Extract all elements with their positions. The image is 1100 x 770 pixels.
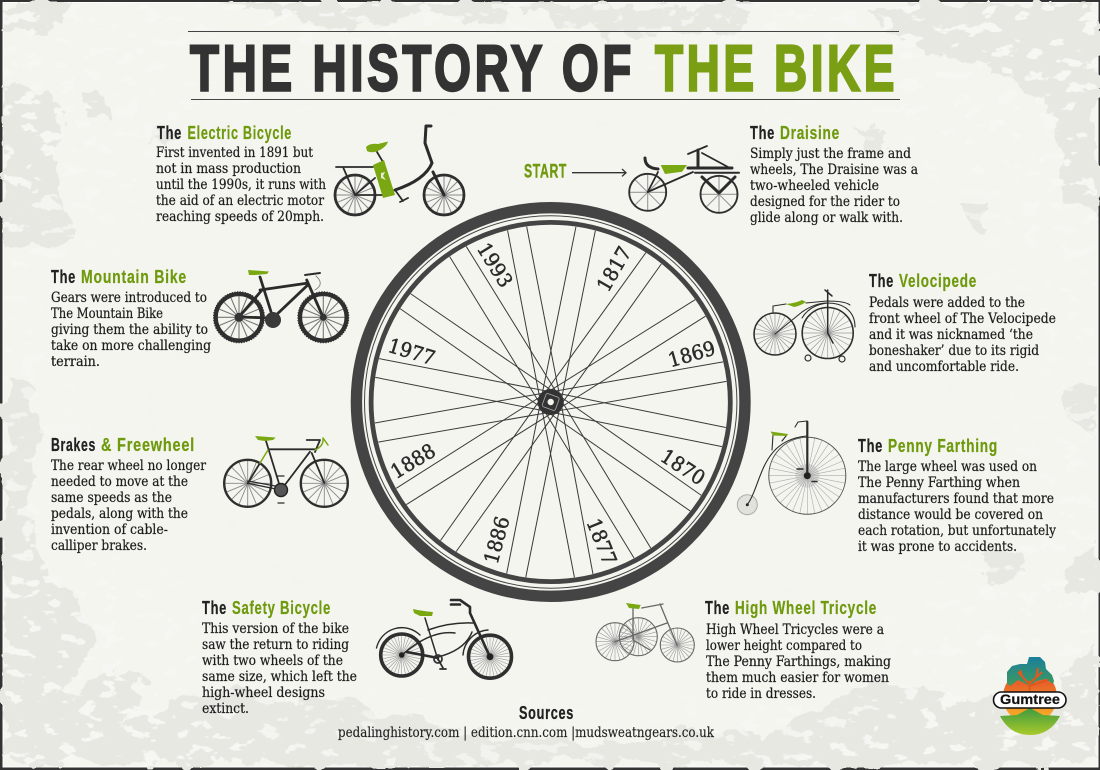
heading: & Freewheel: [101, 435, 195, 455]
heading: [51, 435, 195, 455]
text block: lower height compared to: [706, 638, 862, 654]
heading: The: [750, 123, 775, 143]
text block: distance would be covered on: [858, 507, 1043, 523]
wheel tyre and rim: [356, 208, 745, 596]
title: THE HISTORY OF: [190, 32, 635, 104]
heading: [858, 436, 998, 456]
text block: the aid of an electric motor: [156, 193, 324, 209]
heading: The: [869, 271, 894, 291]
heading: [750, 123, 840, 143]
heading: Velocipede: [899, 271, 977, 291]
text block: [51, 290, 211, 370]
heading: The: [51, 267, 76, 287]
logo orange sun: [1003, 670, 1057, 724]
text block: take on more challenging: [51, 338, 211, 354]
text block: two-wheeled vehicle: [750, 178, 879, 194]
year labels: 1877: [582, 515, 622, 568]
icon: electric bicycle: [335, 126, 464, 215]
text block: The large wheel was used on: [858, 459, 1037, 475]
text block: and it was nicknamed ‘the: [869, 327, 1033, 343]
heading: The: [202, 598, 227, 618]
text block: designed for the rider to: [750, 194, 900, 210]
text block: same size, which left the: [202, 669, 357, 685]
text block: reaching speeds of 20mph.: [156, 209, 324, 225]
sources: [338, 703, 715, 741]
heading: Electric Bicycle: [188, 123, 292, 143]
year labels: 1886: [479, 514, 515, 566]
text block: boneshaker’ due to its rigid: [869, 343, 1039, 359]
text block: to ride in dresses.: [706, 686, 816, 702]
panel: the draisine: [524, 123, 918, 226]
logo pill with wordmark: Gumtree: [1000, 691, 1060, 707]
heading: The: [858, 436, 883, 456]
text block: High Wheel Tricycles were a: [706, 622, 884, 638]
text block: Pedals were added to the: [869, 295, 1025, 311]
panel: the safety bicycle: [202, 598, 514, 717]
heading: Safety Bicycle: [232, 598, 331, 618]
heading: Brakes: [51, 435, 96, 455]
text block: giving them the ability to: [51, 322, 208, 338]
text block: until the 1990s, it runs with: [156, 177, 326, 193]
logo tree canopy: [1007, 657, 1054, 686]
text block: needed to move at the: [51, 474, 188, 490]
logo tree trunk: [1018, 668, 1048, 692]
panel: the penny farthing: [737, 421, 1056, 555]
text block: wheels, The Draisine was a: [750, 162, 918, 178]
logo: Gumtree: [994, 657, 1066, 735]
text block: The Penny Farthing when: [858, 475, 1020, 491]
icon: high wheel tricycle: [589, 603, 701, 668]
text block: First invented in 1891 but: [156, 145, 313, 161]
text block: each rotation, but unfortunately: [858, 523, 1056, 539]
text block: same speeds as the: [51, 490, 172, 506]
text block: with two wheels of the: [202, 653, 343, 669]
text block: The Penny Farthings, making: [706, 654, 891, 670]
panel: the electric bicycle: [156, 123, 464, 225]
heading: High Wheel Tricycle: [735, 598, 877, 618]
panel: the high wheel tricycle: [589, 598, 891, 702]
text block: Simply just the frame and: [750, 146, 911, 162]
year labels: 1870: [656, 444, 710, 490]
wheel spokes: [374, 225, 728, 579]
arrow to first bike: [572, 169, 626, 176]
heading: The: [157, 123, 182, 143]
text block: [706, 622, 891, 702]
heading: Penny Farthing: [888, 436, 998, 456]
panel: the velocipede: [746, 271, 1056, 375]
sources: pedalinghistory.com | edition.cnn.com |mudsweatngears.co.uk: [338, 725, 715, 741]
text block: [858, 459, 1056, 555]
panel: the mountain bike: [51, 267, 349, 370]
text block: not in mass production: [156, 161, 301, 177]
panel: brakes and freewheel: [51, 435, 348, 554]
central bicycle wheel timeline: [356, 208, 745, 596]
text block: pedals, along with the: [51, 506, 188, 522]
text block: front wheel of The Velocipede: [869, 311, 1056, 327]
text block: The rear wheel no longer: [51, 458, 206, 474]
text block: [156, 145, 326, 225]
year labels: 1888: [386, 438, 440, 484]
heading: The: [705, 598, 730, 618]
start label: START: [524, 162, 567, 182]
icon: penny farthing: [737, 421, 853, 521]
text block: This version of the bike: [202, 621, 349, 637]
text block: them much easier for women: [706, 670, 889, 686]
text block: [750, 146, 918, 226]
heading: Draisine: [780, 123, 840, 143]
heading: [869, 271, 977, 291]
year labels: 1977: [385, 333, 438, 370]
text block: [869, 295, 1056, 375]
text block: Gears were introduced to: [51, 290, 207, 306]
text block: terrain.: [51, 354, 100, 370]
text block: extinct.: [202, 701, 249, 717]
heading: [705, 598, 877, 618]
wheel hub: [538, 389, 564, 415]
text block: invention of cable-: [51, 522, 168, 538]
year labels: 1817: [592, 242, 636, 296]
text block: glide along or walk with.: [750, 210, 903, 226]
text block: manufacturers found that more: [858, 491, 1054, 507]
icon: safety bicycle: [376, 600, 514, 680]
year labels: [385, 238, 718, 568]
heading: [51, 267, 187, 287]
icon: velocipede: [746, 290, 863, 368]
sources: Sources: [519, 703, 574, 723]
text block: and uncomfortable ride.: [869, 359, 1019, 375]
heading: [202, 598, 331, 618]
title: THE BIKE: [655, 32, 898, 104]
logo green ground: [1000, 708, 1060, 735]
icon: road bicycle: [224, 436, 348, 507]
heading: [157, 123, 292, 143]
year labels: 1869: [665, 336, 718, 372]
text block: high-wheel designs: [202, 685, 325, 701]
icon: mountain bike: [214, 270, 349, 343]
icon: draisine: [629, 146, 739, 213]
year labels: 1993: [472, 238, 518, 292]
text block: saw the return to riding: [202, 637, 349, 653]
text block: [202, 621, 357, 717]
heading: Mountain Bike: [81, 267, 187, 287]
text block: The Mountain Bike: [51, 306, 163, 322]
text block: calliper brakes.: [51, 538, 147, 554]
text block: [51, 458, 206, 554]
text block: it was prone to accidents.: [858, 539, 1017, 555]
